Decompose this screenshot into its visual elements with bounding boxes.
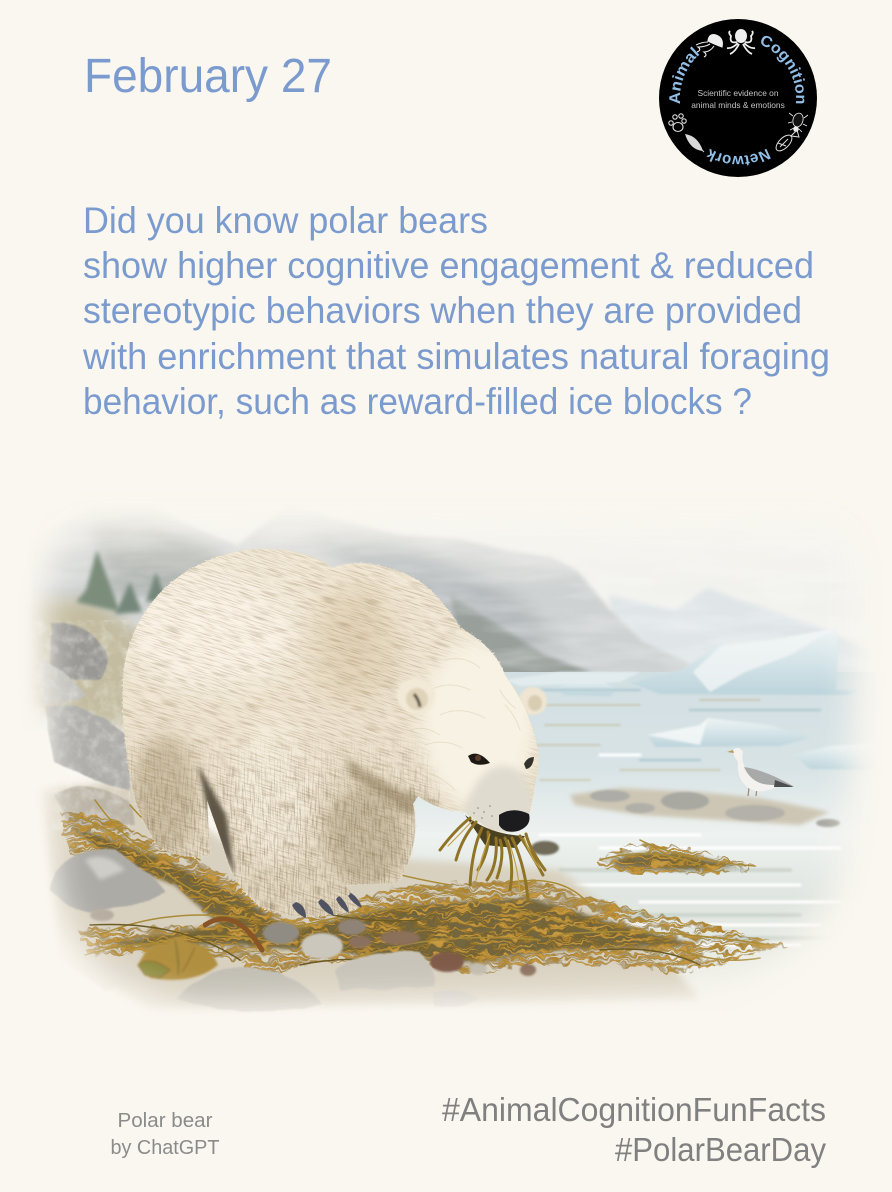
- logo ring text: [669, 36, 805, 166]
- water streaks: [530, 690, 840, 945]
- head fur: [410, 659, 520, 790]
- main question text: behavior, such as reward-filled ice blocks ?: [83, 381, 752, 422]
- image credit: by ChatGPT: [110, 1137, 220, 1159]
- right ice floe: [802, 746, 856, 770]
- seaweed strands: [70, 800, 770, 975]
- whisker spots: [473, 805, 493, 819]
- sea and tidal flat: [380, 672, 890, 1012]
- seaweed shadow base: [70, 825, 740, 962]
- date heading: February 27: [84, 50, 332, 103]
- icon: feather: [685, 134, 704, 152]
- bear ear left: [397, 678, 435, 714]
- seaweed held in mouth: [440, 815, 545, 900]
- distant ice line: [505, 672, 640, 686]
- logo tagline: animal minds & emotions: [691, 100, 785, 110]
- logo disc: [659, 19, 817, 177]
- left hillside with trees: [30, 550, 166, 730]
- bear eye left: [468, 754, 490, 765]
- hashtags: #AnimalCognitionFunFacts: [442, 1091, 826, 1128]
- sky: [590, 566, 829, 624]
- logo ring text: Cognition: [761, 36, 805, 104]
- main question text: stereotypic behaviors when they are provided: [83, 290, 802, 331]
- logo: Animal Cognition Network badge: [659, 19, 817, 177]
- foreground boulders: [70, 950, 478, 1011]
- foreground stones: [90, 909, 536, 976]
- hashtags: [442, 1091, 826, 1168]
- icon: octopus: [727, 29, 755, 54]
- seaweed pile across foreground: [58, 812, 790, 978]
- rocky ledge in water: [531, 788, 840, 855]
- illustration: polar bear on the shore: [30, 516, 868, 1012]
- polar bear: [122, 548, 548, 918]
- bear shading and fur: [122, 549, 538, 916]
- fur texture: [123, 549, 538, 916]
- bear eye right: [524, 757, 534, 769]
- icon: paw print: [669, 114, 686, 132]
- logo tagline: Scientific evidence on: [697, 88, 779, 98]
- main question text: with enrichment that simulates natural foraging: [82, 336, 830, 377]
- main question text: [82, 200, 830, 422]
- left boulders and beach back: [30, 620, 700, 1010]
- hashtags: #PolarBearDay: [615, 1131, 826, 1168]
- leg fur: [127, 740, 440, 916]
- small iceberg: [562, 683, 613, 696]
- bear ear right: [519, 687, 547, 715]
- bear head: [420, 640, 536, 810]
- far mountains: [610, 589, 854, 672]
- grey mountain range: [0, 480, 892, 700]
- image credit: [110, 1110, 220, 1159]
- bear claws: [292, 893, 362, 918]
- icon: jellyfish: [696, 35, 722, 57]
- mouth seaweed dark mass: [465, 815, 525, 848]
- main question text: Did you know polar bears: [83, 200, 488, 241]
- main iceberg: [630, 628, 857, 695]
- image credit: Polar bear: [118, 1110, 213, 1132]
- middle ice floe: [647, 718, 810, 747]
- main question text: show higher cognitive engagement & reduced: [83, 245, 814, 286]
- front left boulder: [50, 849, 165, 912]
- logo ring text: Animal: [669, 46, 700, 104]
- icon: fish: [773, 130, 799, 154]
- gull: [727, 748, 794, 796]
- bear nose: [499, 810, 530, 832]
- bear silhouette with fur edge: [110, 540, 550, 930]
- bear muzzle: [464, 766, 532, 834]
- logo ring text: Network: [706, 148, 771, 166]
- logo tagline: [691, 88, 785, 110]
- kelp frond: [138, 937, 218, 980]
- icon: beetle: [788, 112, 808, 132]
- mouth seaweed strands: [440, 818, 545, 900]
